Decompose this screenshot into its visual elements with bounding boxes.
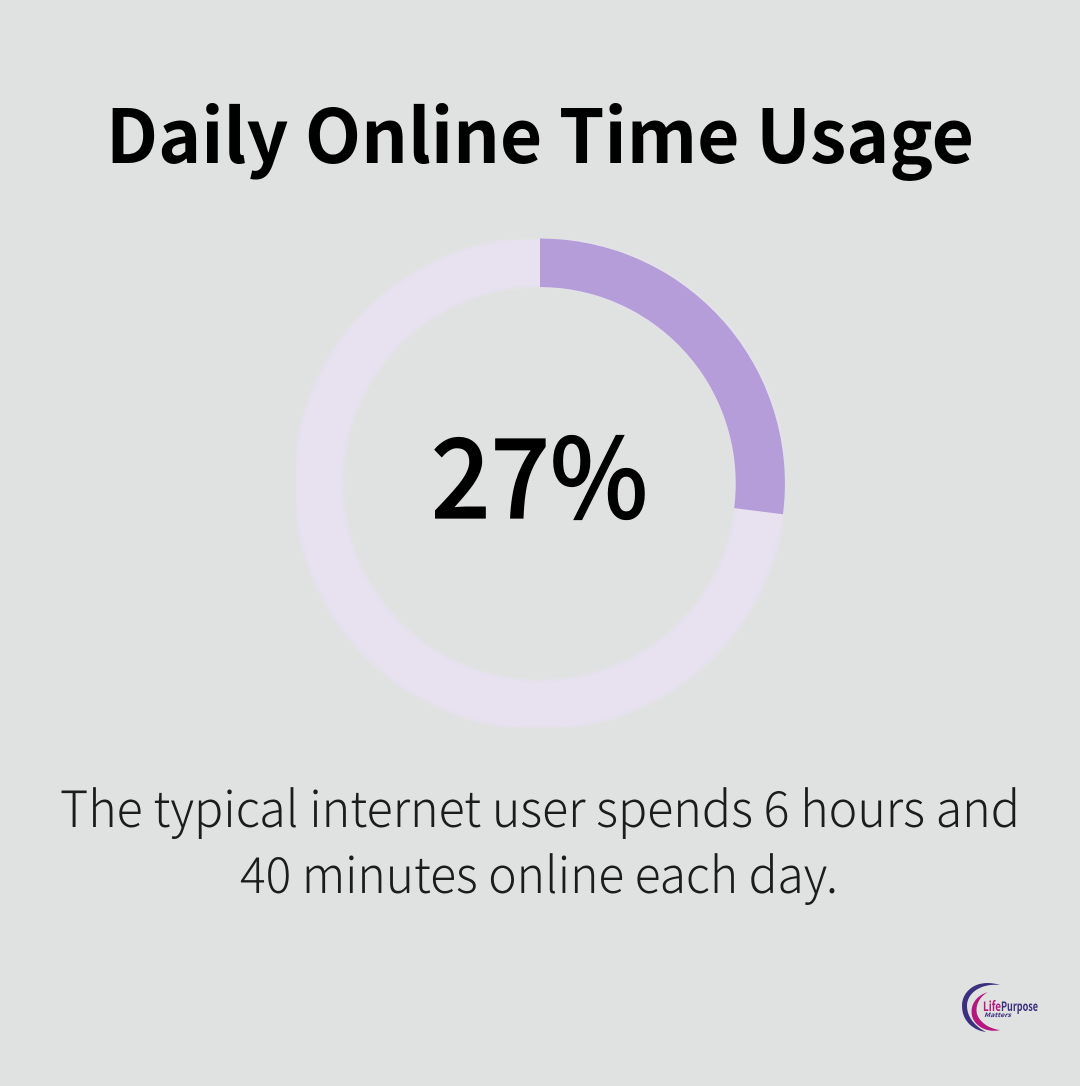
- logo tagline: Matters: [984, 1010, 1012, 1019]
- percentage value: 27%: [431, 390, 648, 550]
- description text: The typical internet user spends 6 hours and: [60, 770, 1020, 842]
- donut chart: 27%: [318, 238, 785, 705]
- description text: 40 minutes online each day.: [240, 836, 838, 908]
- logo swoosh arcs: [962, 983, 1000, 1032]
- title: Daily Online Time Usage: [106, 78, 974, 185]
- logo wordmark: Life: [983, 996, 1001, 1015]
- logo: Life Purpose Matters: [962, 983, 1038, 1032]
- logo: Life Purpose Matters: Purpose: [1001, 996, 1038, 1015]
- donut track: [318, 262, 762, 705]
- description text: [60, 770, 1020, 908]
- donut value arc: [540, 238, 785, 514]
